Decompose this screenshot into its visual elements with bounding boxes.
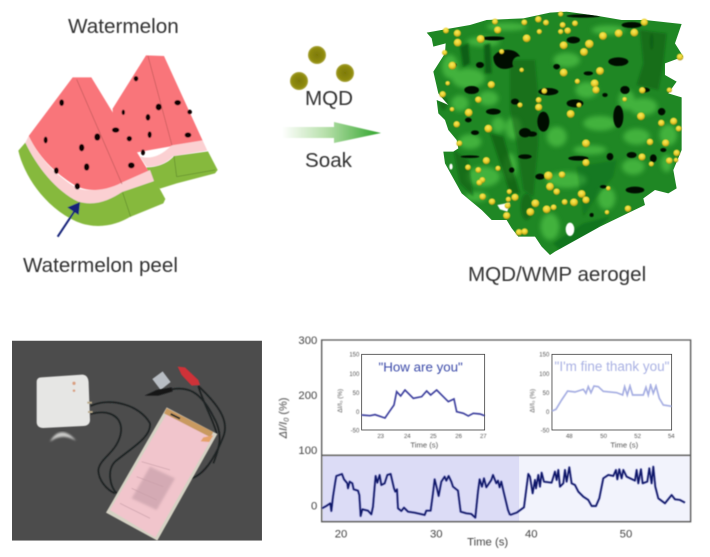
inset: How are you: 50 [353, 391, 360, 397]
inset: I'm fine thank you [529, 353, 675, 450]
axis frame [322, 340, 691, 522]
icon: MQD quantum dots [290, 46, 354, 90]
inset: How are you: 100 [349, 372, 360, 378]
inset: I'm fine thank you: ΔI/I₀ (%) [529, 389, 536, 413]
inset: How are you: 24 [404, 434, 411, 440]
y axis title: (%) [278, 398, 290, 418]
y axis labels: 200 [298, 390, 317, 402]
inset: How are you: Time (s) [410, 441, 439, 450]
smartphone [106, 407, 217, 541]
inset: I'm fine thank you: Time (s) [610, 441, 639, 450]
inset: How are you: 0 [356, 410, 360, 416]
x axis labels: 30 [430, 528, 443, 540]
white holes [449, 164, 574, 236]
inset: I'm fine thank you: 150 [539, 353, 550, 359]
y axis labels [298, 335, 317, 512]
inset: How are you: 23 [377, 434, 385, 440]
chart: current response vs time [278, 335, 691, 549]
photo: sensor device and smartphone [12, 341, 262, 541]
light reflection [50, 432, 76, 442]
inset: I'm fine thank you: 50 [600, 434, 608, 440]
sensor sample [152, 371, 171, 390]
inset: I'm fine thank you: 54 [668, 434, 675, 440]
inset: How are you: 26 [455, 434, 463, 440]
arrow: pointer to peel [58, 202, 80, 237]
label: MQD: MQD [305, 87, 353, 110]
arrow: soak process [282, 122, 381, 143]
inset: How are you: ΔI/I₀ (%) [337, 389, 344, 413]
front slice [18, 77, 165, 226]
photo background [12, 341, 262, 541]
seeds [44, 76, 192, 190]
inset: How are you: 25 [430, 434, 437, 440]
y axis labels: 100 [298, 445, 317, 457]
heading: Watermelon: Watermelon [68, 15, 179, 38]
label: MQD/WMP aerogel: MQD/WMP aerogel [468, 263, 646, 286]
porous green body [423, 10, 687, 258]
x axis title: Time (s) [467, 537, 508, 549]
inset: I'm fine thank you: 0 [546, 410, 550, 416]
lighter highlights [442, 23, 677, 240]
inset: How are you: 27 [480, 434, 487, 440]
illustration: MQD/WMP aerogel cube [423, 10, 687, 258]
inset: How are you: -50 [351, 429, 360, 435]
inset: I'm fine thank you: "I'm fine thank you" [555, 359, 670, 374]
inset: I'm fine thank you: 50 [543, 391, 550, 397]
alligator clips [145, 367, 200, 396]
y axis labels: 300 [298, 335, 317, 347]
inset: How are you: 150 [349, 353, 360, 359]
inset: I'm fine thank you: 52 [634, 434, 642, 440]
inset: I'm fine thank you: -50 [541, 429, 550, 435]
x axis labels: 20 [335, 528, 347, 540]
x axis labels: 40 [525, 528, 538, 540]
label: Watermelon peel: Watermelon peel [23, 254, 178, 277]
inset: I'm fine thank you: 48 [566, 434, 573, 440]
label: Soak: Soak [305, 149, 353, 172]
lower shaded bands [323, 456, 691, 521]
sensor box [37, 375, 93, 428]
inset: I'm fine thank you: 100 [539, 372, 550, 378]
y axis title: 0 [282, 417, 291, 422]
inset: How are you [337, 353, 487, 450]
dark pores [450, 14, 666, 217]
inset: How are you: "How are you" [379, 360, 463, 375]
wires [91, 386, 225, 493]
y axis title: ΔI/I [278, 422, 290, 438]
x axis labels: 50 [620, 528, 632, 540]
illustration: watermelon slices [18, 55, 218, 237]
main signal trace [322, 467, 685, 518]
dark green folds [439, 30, 667, 250]
x axis labels [335, 528, 632, 540]
back slice [113, 55, 218, 189]
y axis labels: 0 [311, 500, 317, 512]
yellow quantum dots [439, 11, 683, 236]
